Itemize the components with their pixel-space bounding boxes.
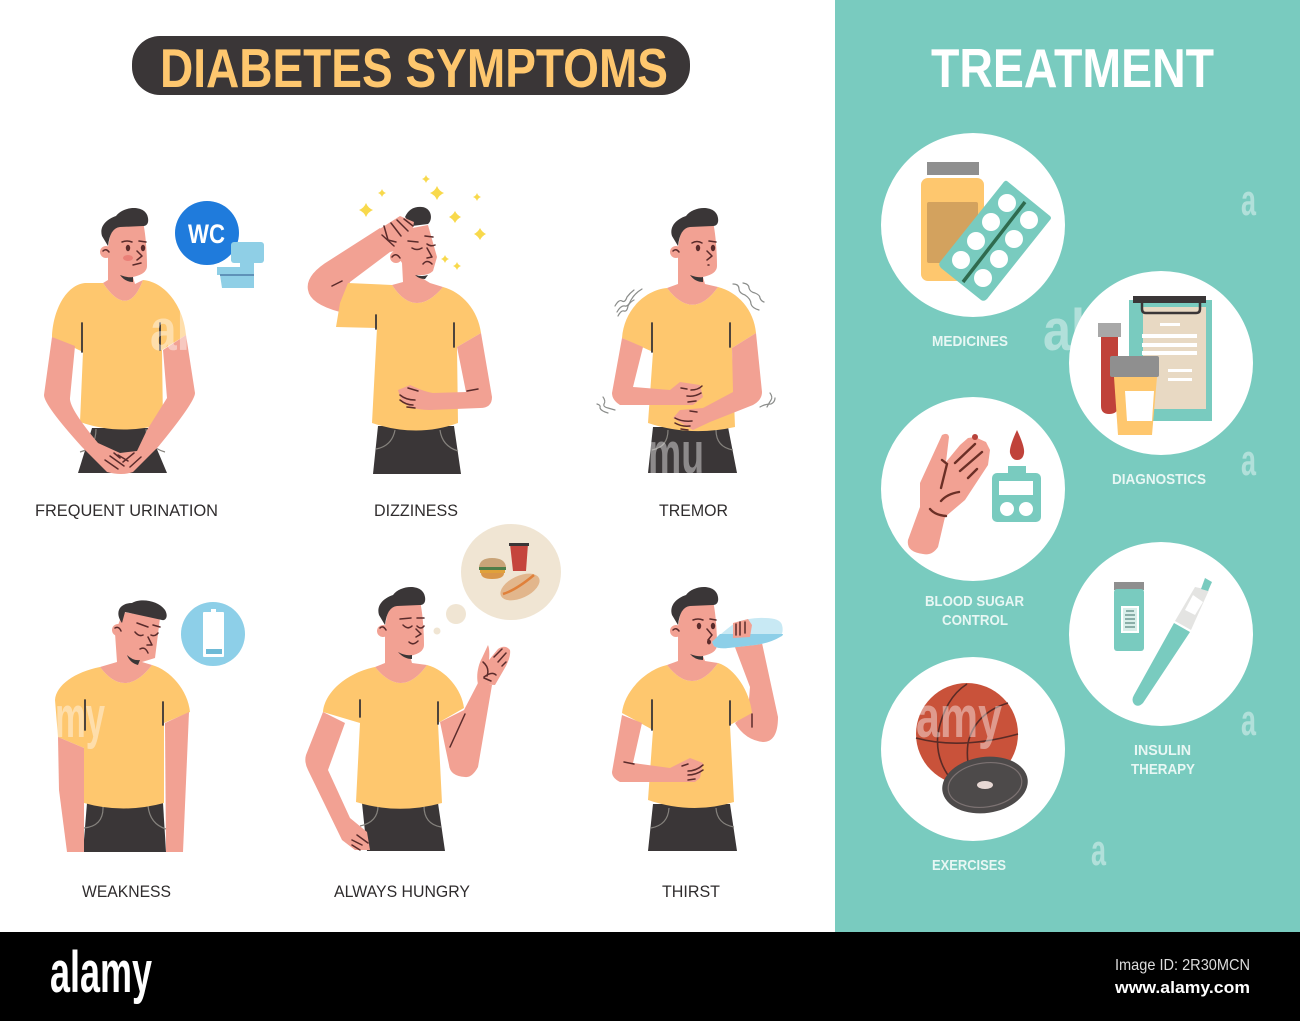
label: thirst: THIRST [662,882,720,901]
label: insulin therapy [1131,742,1195,778]
watermark: al [150,298,190,363]
heading: treatment: TREATMENT [931,37,1214,99]
footer image id: Image ID: 2R30MCN [1115,957,1250,974]
label: frequent urination: FREQUENT URINATION [35,501,218,520]
watermark: a [1241,176,1256,225]
label: blood sugar control [925,593,1024,629]
panel: diabetes symptoms [35,36,783,901]
icon: dizziness stars [359,175,486,270]
label: medicines: MEDICINES [932,333,1008,350]
figure: tremor [597,208,775,473]
watermark: a [1091,826,1106,875]
icon: diagnostics [1069,271,1253,455]
icon: exercises [881,657,1065,841]
label: always hungry: ALWAYS HUNGRY [334,882,470,901]
label: blood sugar control: CONTROL [942,612,1008,629]
watermark: my [55,685,105,750]
watermark: a [1241,696,1256,745]
footer bar [0,932,1300,1021]
icon: low battery [181,602,245,666]
figure: dizziness [308,175,492,474]
title: diabetes symptoms: DIABETES SYMPTOMS [160,37,668,99]
icon: tremor lines [597,283,775,413]
label: dizziness: DIZZINESS [374,501,458,520]
icon: food thought bubble [434,524,561,634]
figure: weakness [55,600,245,852]
watermark: mu [648,421,704,486]
label: weakness: WEAKNESS [82,882,171,901]
figure: thirst [612,587,783,851]
watermark: a [1241,436,1256,485]
icon: blood sugar control [881,397,1065,581]
footer logo: alamy [50,940,152,1005]
figure: frequent urination [44,201,264,474]
icon: water bottle [712,618,783,648]
icon: insulin therapy [1069,542,1253,726]
watermark: amy [916,685,1002,750]
label: insulin therapy: THERAPY [1131,761,1195,778]
icon: WC sign and toilet: WC [188,219,225,249]
icon: WC sign and toilet [175,201,264,288]
label: exercises: EXERCISES [932,857,1006,874]
watermark [55,176,1256,875]
label: blood sugar control: BLOOD SUGAR [925,593,1024,610]
footer url: www.alamy.com [1114,978,1250,997]
label: insulin therapy: INSULIN [1134,742,1191,759]
label: diagnostics: DIAGNOSTICS [1112,471,1206,488]
icon: medicines [881,133,1065,317]
watermark: al [1043,298,1085,363]
panel: treatment [835,0,1300,932]
label: tremor: TREMOR [659,501,728,520]
figure: always hungry [305,524,561,851]
